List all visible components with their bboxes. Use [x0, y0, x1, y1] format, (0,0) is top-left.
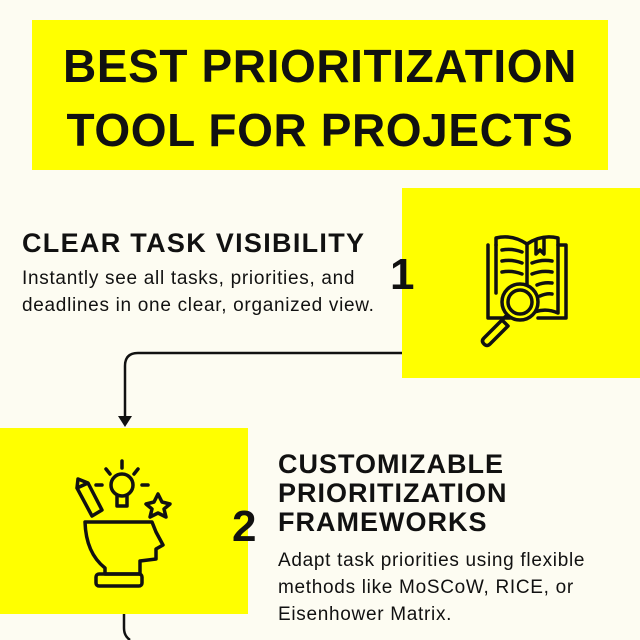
heading 2	[278, 449, 508, 537]
number 2: 2	[232, 502, 256, 551]
body 2: Adapt task priorities using flexible	[278, 550, 585, 571]
body 2: Eisenhower Matrix.	[278, 604, 452, 625]
icon: book with magnifier	[480, 235, 568, 348]
heading 2: PRIORITIZATION	[278, 478, 508, 508]
body 2	[278, 550, 585, 625]
title	[32, 20, 608, 170]
heading 2: CUSTOMIZABLE	[278, 449, 504, 479]
body 1: deadlines in one clear, organized view.	[22, 295, 375, 316]
heading 2: FRAMEWORKS	[278, 507, 487, 537]
heading 1: CLEAR TASK VISIBILITY	[22, 228, 365, 258]
body 1: Instantly see all tasks, priorities, and	[22, 268, 355, 289]
number 1: 1	[390, 250, 414, 299]
title: TOOL FOR PROJECTS	[67, 104, 573, 156]
title: BEST PRIORITIZATION	[63, 40, 577, 92]
icon: head with ideas	[75, 459, 172, 588]
body 2: methods like MoSCoW, RICE, or	[278, 577, 574, 598]
body 1	[22, 268, 375, 316]
panel 1: icon box	[402, 188, 640, 378]
panel 2: icon box	[0, 428, 248, 614]
